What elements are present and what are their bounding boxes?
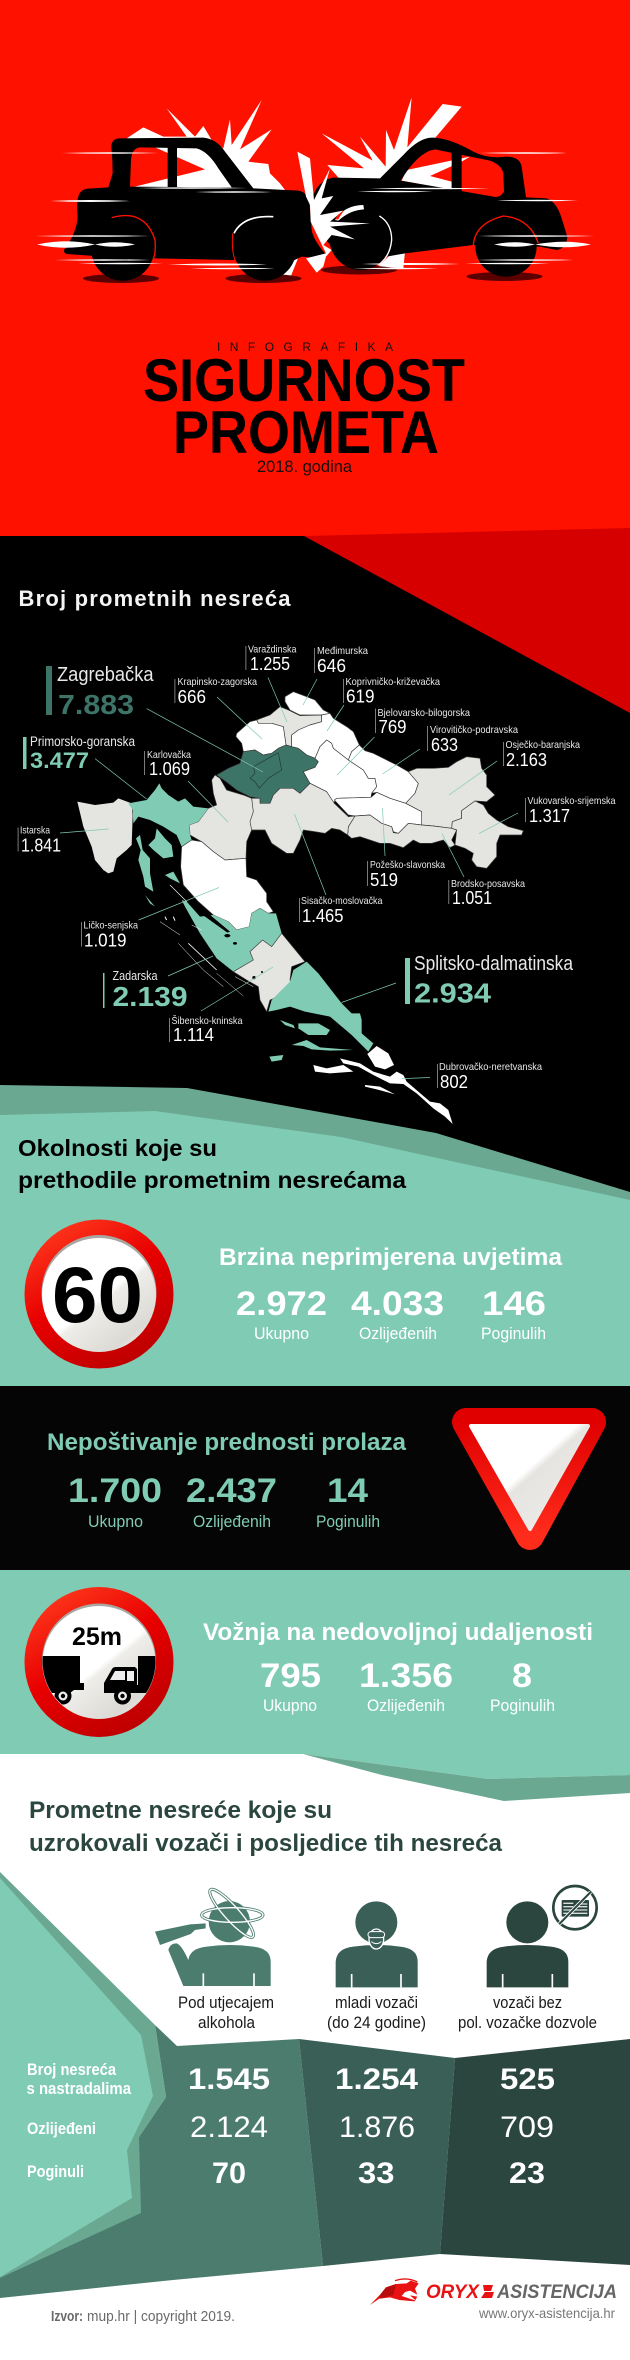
captions: Poginulih <box>481 1324 546 1343</box>
Velebit channel <box>189 896 230 933</box>
numbers: 146 <box>482 1285 546 1323</box>
explosion behind right car <box>322 97 470 268</box>
label: Primorsko-goranska <box>23 734 135 773</box>
circumstances heading <box>18 1135 406 1193</box>
Istarska <box>77 798 133 873</box>
thin Adriatic islands <box>160 885 253 996</box>
label: Zadarska <box>103 969 188 1012</box>
row labels: Broj nesreća <box>27 2061 117 2079</box>
label: Virovitičko-podravska <box>427 724 518 755</box>
dark red diagonal wedge <box>304 528 630 713</box>
map section background <box>0 536 630 1206</box>
row labels: Ozlijeđeni <box>27 2120 96 2138</box>
label: Primorsko-goranska: 3.477 <box>30 748 89 773</box>
label: Vukovarsko-srijemska: Vukovarsko-srijemska <box>528 795 616 807</box>
northern and eastern counties <box>217 692 523 868</box>
Šibenik spots <box>252 971 263 979</box>
label: Varaždinska <box>246 644 297 674</box>
numbers: 4.033 <box>351 1285 444 1323</box>
source note: mup.hr | copyright 2019. <box>87 2309 235 2325</box>
central impact spark <box>297 152 370 273</box>
Krapinsko-zagorska <box>236 720 286 755</box>
Šibensko-kninska <box>233 933 305 1012</box>
Ličko-senjska <box>181 840 273 930</box>
label: Zadarska: Zadarska <box>112 969 158 983</box>
teal divider wedge <box>303 1754 630 1779</box>
captions <box>254 1324 546 1343</box>
icon: yield sign <box>466 1422 592 1536</box>
label: Dubrovačko-neretvanska <box>437 1061 542 1092</box>
label: Brodsko-posavska <box>448 878 525 908</box>
label: Karlovačka: Karlovačka <box>147 749 191 761</box>
logo: Oryx Asistencija <box>370 2279 617 2321</box>
numbers: 1.356 <box>359 1657 453 1695</box>
label: Karlovačka <box>144 749 191 779</box>
logo wordmark second part: ASISTENCIJA <box>496 2282 617 2303</box>
label: Bjelovarsko-bilogorska <box>375 707 470 737</box>
logo icon: leaping oryx <box>370 2279 419 2305</box>
label: Međimurska <box>314 645 368 676</box>
label: Ličko-senjska: Ličko-senjska <box>84 920 138 932</box>
captions: Ukupno <box>254 1324 309 1343</box>
label: Istarska: Istarska <box>20 824 50 836</box>
map heading: Broj prometnih nesreća <box>18 586 291 611</box>
heading: Nepoštivanje prednosti prolaza <box>47 1429 407 1456</box>
label: Koprivničko-križevačka <box>343 676 440 706</box>
label: Splitsko-dalmatinska <box>405 953 574 1008</box>
column captions: (do 24 godine) <box>327 2013 426 2032</box>
numbers: 14 <box>327 1472 368 1510</box>
row: accidents: 1.254 <box>335 2063 418 2096</box>
column: alcohol background <box>0 2025 323 2298</box>
captions <box>88 1512 380 1531</box>
label: Međimurska: 646 <box>317 656 346 676</box>
column captions: mladi vozači <box>335 1993 418 2012</box>
label: Požeško-slavonska: 519 <box>370 870 398 890</box>
row labels: Poginuli <box>27 2163 84 2181</box>
Osječko-baranjska <box>406 757 495 828</box>
row: killed: 33 <box>358 2157 394 2190</box>
row: accidents: 1.545 <box>188 2063 270 2096</box>
label: Šibensko-kninska <box>169 1014 243 1045</box>
label: Ličko-senjska: 1.019 <box>84 930 126 950</box>
Varaždinska <box>257 707 322 747</box>
panel: following distance stats <box>203 1619 593 1715</box>
captions: Ozlijeđenih <box>367 1696 445 1715</box>
captions: Ukupno <box>263 1696 317 1715</box>
header background <box>0 0 630 537</box>
row: injured <box>190 2111 554 2144</box>
column: young drivers background <box>299 2039 455 2266</box>
captions <box>263 1696 555 1715</box>
title block <box>143 340 465 476</box>
row: injured: 709 <box>500 2111 554 2144</box>
label: Virovitičko-podravska: Virovitičko-podravska <box>430 724 518 736</box>
label: Splitsko-dalmatinska: Splitsko-dalmatinska <box>414 953 574 975</box>
label: Brodsko-posavska: 1.051 <box>452 888 492 908</box>
year: 2018. godina <box>257 457 353 476</box>
numbers <box>260 1657 532 1695</box>
icon: driver without licence <box>487 1886 597 1987</box>
right car <box>310 138 567 277</box>
main title line 2: PROMETA <box>173 399 439 466</box>
row: killed: 70 <box>212 2157 246 2190</box>
heading: Brzina neprimjerena uvjetima <box>219 1244 563 1271</box>
map of Croatia <box>77 692 523 1124</box>
circumstances band shadow <box>0 1085 630 1210</box>
left wedge <box>0 1878 153 2277</box>
illustration: two crashing cars <box>35 97 594 283</box>
circumstances panel background <box>0 1111 630 1386</box>
Zadarska <box>182 900 282 972</box>
Međimurska <box>285 692 330 715</box>
circumstances heading: Okolnosti koje su <box>18 1135 217 1161</box>
numbers: 1.700 <box>68 1472 162 1510</box>
panel background: right of way <box>0 1386 630 1570</box>
captions: Poginulih <box>490 1696 555 1715</box>
label: Primorsko-goranska: Primorsko-goranska <box>30 734 135 749</box>
main title: SIGURNOST <box>143 347 465 414</box>
icon: speed limit 60 sign <box>24 1220 174 1368</box>
Karlovačka <box>189 775 253 860</box>
Brodsko-posavska <box>348 815 457 848</box>
label: Krapinsko-zagorska: 666 <box>178 687 206 707</box>
icon: 25m distance sign: 25m <box>72 1623 122 1651</box>
logo wordmark: ORYX <box>426 2282 480 2303</box>
heading: Vožnja na nedovoljnoj udaljenosti <box>203 1619 593 1646</box>
drivers heading: Prometne nesreće koje su <box>29 1797 332 1824</box>
captions: Ozlijeđenih <box>359 1324 437 1343</box>
label: Koprivničko-križevačka: Koprivničko-križevačka <box>346 676 440 688</box>
label: Požeško-slavonska <box>367 859 445 890</box>
label: Sisačko-moslovačka: Sisačko-moslovačka <box>301 895 383 907</box>
row labels <box>26 2061 132 2181</box>
kicker: INFOGRAFIKA <box>217 340 393 354</box>
label: Brodsko-posavska: Brodsko-posavska <box>451 878 525 890</box>
label: Varaždinska: Varaždinska <box>248 644 297 656</box>
label: Šibensko-kninska: Šibensko-kninska <box>172 1014 243 1027</box>
label: Bjelovarsko-bilogorska: 769 <box>378 717 406 737</box>
western and coastal counties <box>77 775 305 1012</box>
left car <box>64 138 325 281</box>
website: www.oryx-asistencija.hr <box>478 2305 615 2321</box>
label: Istarska <box>18 824 61 856</box>
captions: Ozlijeđenih <box>193 1512 271 1531</box>
row: accidents: 525 <box>500 2063 555 2096</box>
label: Dubrovačko-neretvanska: Dubrovačko-neretvanska <box>439 1061 542 1073</box>
Virovitičko-podravska <box>348 745 418 803</box>
Dubrovačko-neretvanska <box>313 1046 453 1124</box>
Požeško-slavonska <box>334 792 422 833</box>
panel: speed stats <box>219 1244 563 1343</box>
label: Osječko-baranjska: Osječko-baranjska <box>506 739 580 751</box>
label: Osječko-baranjska <box>503 739 580 770</box>
row: injured: 2.124 <box>190 2111 268 2144</box>
label: Zagrebačka: 7.883 <box>58 689 134 720</box>
row: killed <box>212 2157 545 2190</box>
label: Sisačko-moslovačka <box>299 895 383 926</box>
label: Splitsko-dalmatinska: 2.934 <box>414 978 491 1008</box>
numbers: 795 <box>260 1657 321 1695</box>
label: Krapinsko-zagorska: Krapinsko-zagorska <box>178 676 257 688</box>
numbers: 8 <box>512 1657 532 1695</box>
label: Vukovarsko-srijemska <box>525 795 616 826</box>
table values <box>188 2063 555 2190</box>
circumstances heading: prethodile prometnim nesrećama <box>18 1167 406 1193</box>
southern Dalmatia <box>268 962 453 1124</box>
Zagrebačka <box>217 745 318 803</box>
numbers <box>68 1472 368 1510</box>
Sisačko-moslovačka <box>249 783 355 853</box>
column captions <box>178 1993 597 2032</box>
column captions: vozači bez <box>493 1993 562 2012</box>
row labels: s nastradalima <box>26 2080 132 2098</box>
white lower section background <box>0 1754 630 2360</box>
label: Karlovačka: 1.069 <box>149 759 190 779</box>
captions: Ukupno <box>88 1512 143 1531</box>
drivers heading: uzrokovali vozači i posljedice tih nesreća <box>29 1830 503 1857</box>
source note: Izvor: <box>51 2309 83 2325</box>
wheel shadows <box>83 266 542 283</box>
label: Krapinsko-zagorska <box>174 676 257 707</box>
label: Sisačko-moslovačka: 1.465 <box>302 906 344 926</box>
panel: right of way stats <box>47 1429 407 1531</box>
numbers: 2.972 <box>236 1285 327 1323</box>
label: Varaždinska: 1.255 <box>250 654 290 674</box>
column captions: Pod utjecajem <box>178 1993 274 2012</box>
drivers heading <box>29 1797 503 1857</box>
logo flag mark <box>483 2285 493 2291</box>
small channel spots <box>224 934 237 945</box>
speed lines <box>35 152 594 269</box>
Vukovarsko-srijemska <box>452 801 523 868</box>
label: Bjelovarsko-bilogorska: Bjelovarsko-bilogorska <box>378 707 470 719</box>
label: Vukovarsko-srijemska: 1.317 <box>529 806 570 826</box>
label: Virovitičko-podravska: 633 <box>431 735 458 755</box>
icon: 25m distance sign <box>24 1587 174 1737</box>
label: Požeško-slavonska: Požeško-slavonska <box>370 859 445 871</box>
label: Zagrebačka <box>46 664 154 720</box>
icon: drunk driver <box>155 1885 271 1986</box>
divider shadow <box>303 1754 630 1801</box>
column captions: pol. vozačke dozvole <box>458 2013 597 2032</box>
label: Ličko-senjska <box>81 920 138 950</box>
label: Zagrebačka: Zagrebačka <box>57 664 154 686</box>
icon: young driver with pacifier <box>336 1901 418 1987</box>
column captions: alkohola <box>198 2013 255 2032</box>
row: injured: 1.876 <box>339 2111 415 2144</box>
left wedge shadow <box>0 1872 166 2278</box>
label: Dubrovačko-neretvanska: 802 <box>440 1072 468 1092</box>
Grad Zagreb border <box>250 753 282 788</box>
label: Osječko-baranjska: 2.163 <box>506 750 547 770</box>
numbers: 2.437 <box>186 1472 277 1510</box>
row: killed: 23 <box>509 2157 545 2190</box>
label: Zadarska: 2.139 <box>112 981 188 1012</box>
Koprivničko-križevačka <box>292 713 359 760</box>
numbers <box>236 1285 546 1323</box>
leader lines <box>60 678 518 1079</box>
Splitsko-dalmatinska <box>268 962 373 1062</box>
Bjelovarsko-bilogorska <box>303 740 377 803</box>
logo flag mark lower <box>481 2292 494 2298</box>
captions: Poginulih <box>316 1512 380 1531</box>
icon: speed limit 60 sign: 60 <box>52 1250 143 1339</box>
explosion behind left car <box>127 100 300 280</box>
row: accidents <box>188 2063 555 2096</box>
column: no licence background <box>440 2039 630 2265</box>
label: Koprivničko-križevačka: 619 <box>346 686 374 706</box>
Primorsko-goranska <box>128 783 208 907</box>
label: Šibensko-kninska: 1.114 <box>173 1025 214 1045</box>
label: Istarska: 1.841 <box>21 836 61 856</box>
panel background: following distance <box>0 1570 630 1754</box>
label: Međimurska: Međimurska <box>317 645 368 657</box>
